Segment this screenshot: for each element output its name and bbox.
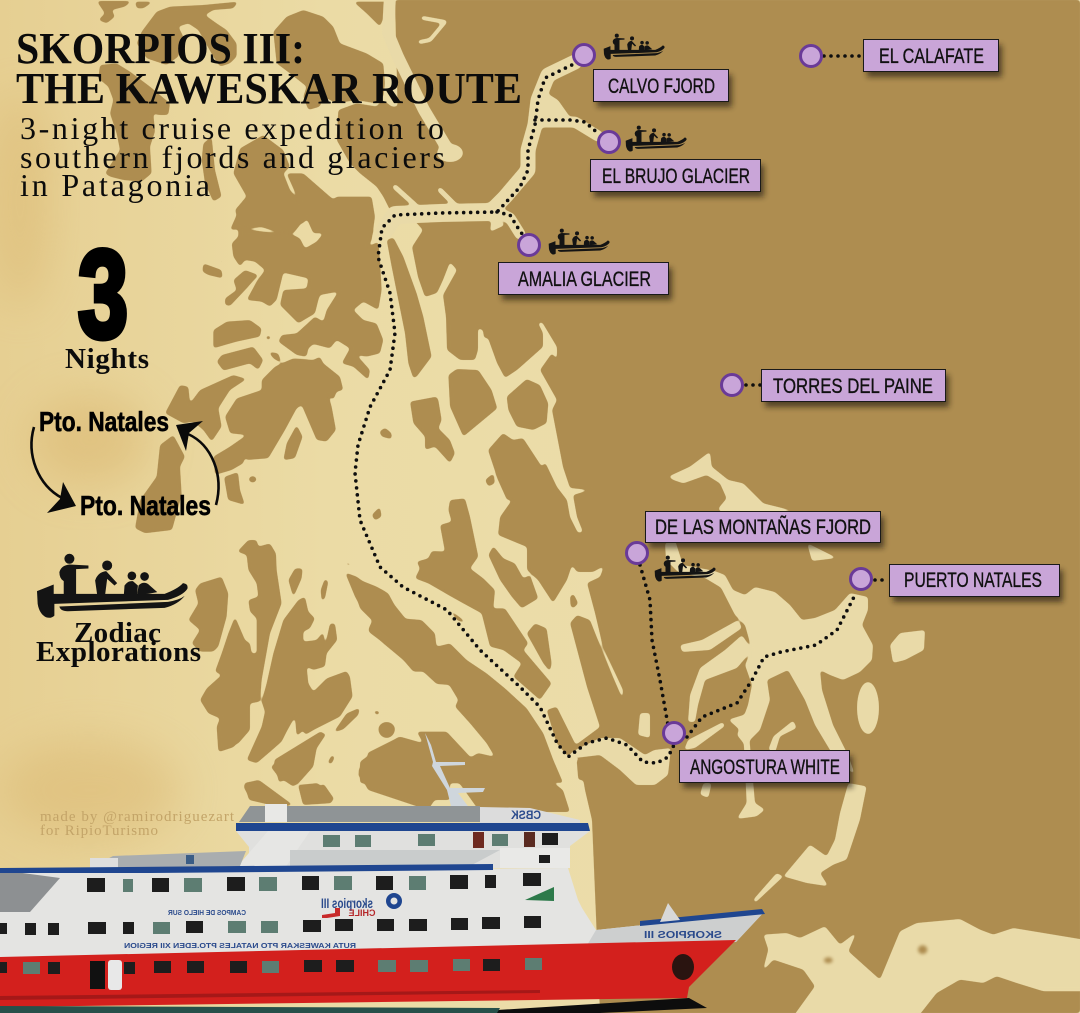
ship blue band top [236,823,590,831]
ship upper deck railing [239,806,480,822]
ship red hull [0,940,736,1007]
credit [40,809,235,839]
label: Torres del Paine [762,370,949,407]
ship bridge deck [236,831,590,868]
label: Angostura White: ANGOSTURA WHITE [690,756,840,779]
label: Calvo Fjord [594,70,732,107]
ship main white hull [0,868,764,958]
round trip: Pto. Natales with arrows: Pto. Natales [80,490,211,521]
ship side lettering: CHILE [348,908,376,918]
ship windows [0,832,558,974]
round trip: Pto. Natales with arrows: Pto. Natales [39,406,169,437]
ship side lettering: SKORPIOS III [644,930,722,941]
subtitle [20,110,445,203]
ship door [90,960,122,990]
ship logo [322,887,554,918]
title [16,24,522,113]
land north-west lower [135,197,383,533]
ship side lettering: CAMPOS DE HIELO SUR [168,910,246,917]
icons: small zodiac boats [549,34,716,582]
zodiac caption: Zodiac [74,617,161,649]
label: El Calafate [864,40,1002,77]
land behind the ship [219,720,570,812]
label: Amalia Glacier [498,262,672,300]
credit: for RipioTurismo [40,823,158,839]
ship bow rail [640,909,765,926]
water channels [385,0,1080,1013]
zodiac caption: Explorations [36,636,201,668]
ship mast [425,733,485,822]
title: THE KAWESKAR ROUTE [16,64,522,113]
label: De las Montañas Fjord [646,512,884,548]
label: Calvo Fjord: CALVO FJORD [608,75,715,98]
zodiac caption [36,617,201,668]
label: El Brujo Glacier: EL BRUJO GLACIER [602,165,750,188]
credit: made by @ramirodriguezart [40,809,235,825]
label: Angostura White [680,750,853,788]
label: Puerto Natales [890,564,1063,602]
islands centre lower [350,498,632,783]
big number 3: 3 [78,226,128,364]
label: El Brujo Glacier [590,160,764,197]
label: Torres del Paine: TORRES DEL PAINE [773,375,933,398]
ship lower deck left [90,851,246,868]
ship side lettering: RUTA KAWESKAR PTO NATALES PTO.EDEN XII REGION [124,941,356,950]
location markers [518,44,872,744]
subtitle: in Patagonia [20,167,210,203]
nights caption: Nights [65,343,149,375]
islands south-west [188,540,450,800]
label: Amalia Glacier: AMALIA GLACIER [518,268,651,291]
water channels north-west [388,0,463,205]
label: De las Montañas Fjord: DE LAS MONTAÑAS FJORD [655,515,871,539]
ship call sign: CBSK [511,808,541,822]
ship waterline [497,998,707,1013]
title: SKORPIOS III: [16,24,305,73]
ship blue band mid [0,864,493,873]
water fjords south-east [700,713,1080,1013]
icon: zodiac boat large [37,554,188,618]
ship side lettering [124,895,722,950]
islands centre upper [360,237,548,487]
ship side lettering: skorpios III [321,895,373,911]
mainland east [395,0,1080,1013]
label: El Calafate: EL CALAFATE [879,45,984,68]
water lakes and fjords east [575,452,925,785]
land around the title [97,1,427,233]
water channels along the northern route [385,40,598,234]
round trip: Pto. Natales with arrows [32,406,218,521]
subtitle: 3-night cruise expedition to [20,110,444,146]
route: dotted cruise line [355,56,889,763]
subtitle: southern fjords and glaciers [20,139,445,175]
ship: Skorpios III [0,733,765,1013]
